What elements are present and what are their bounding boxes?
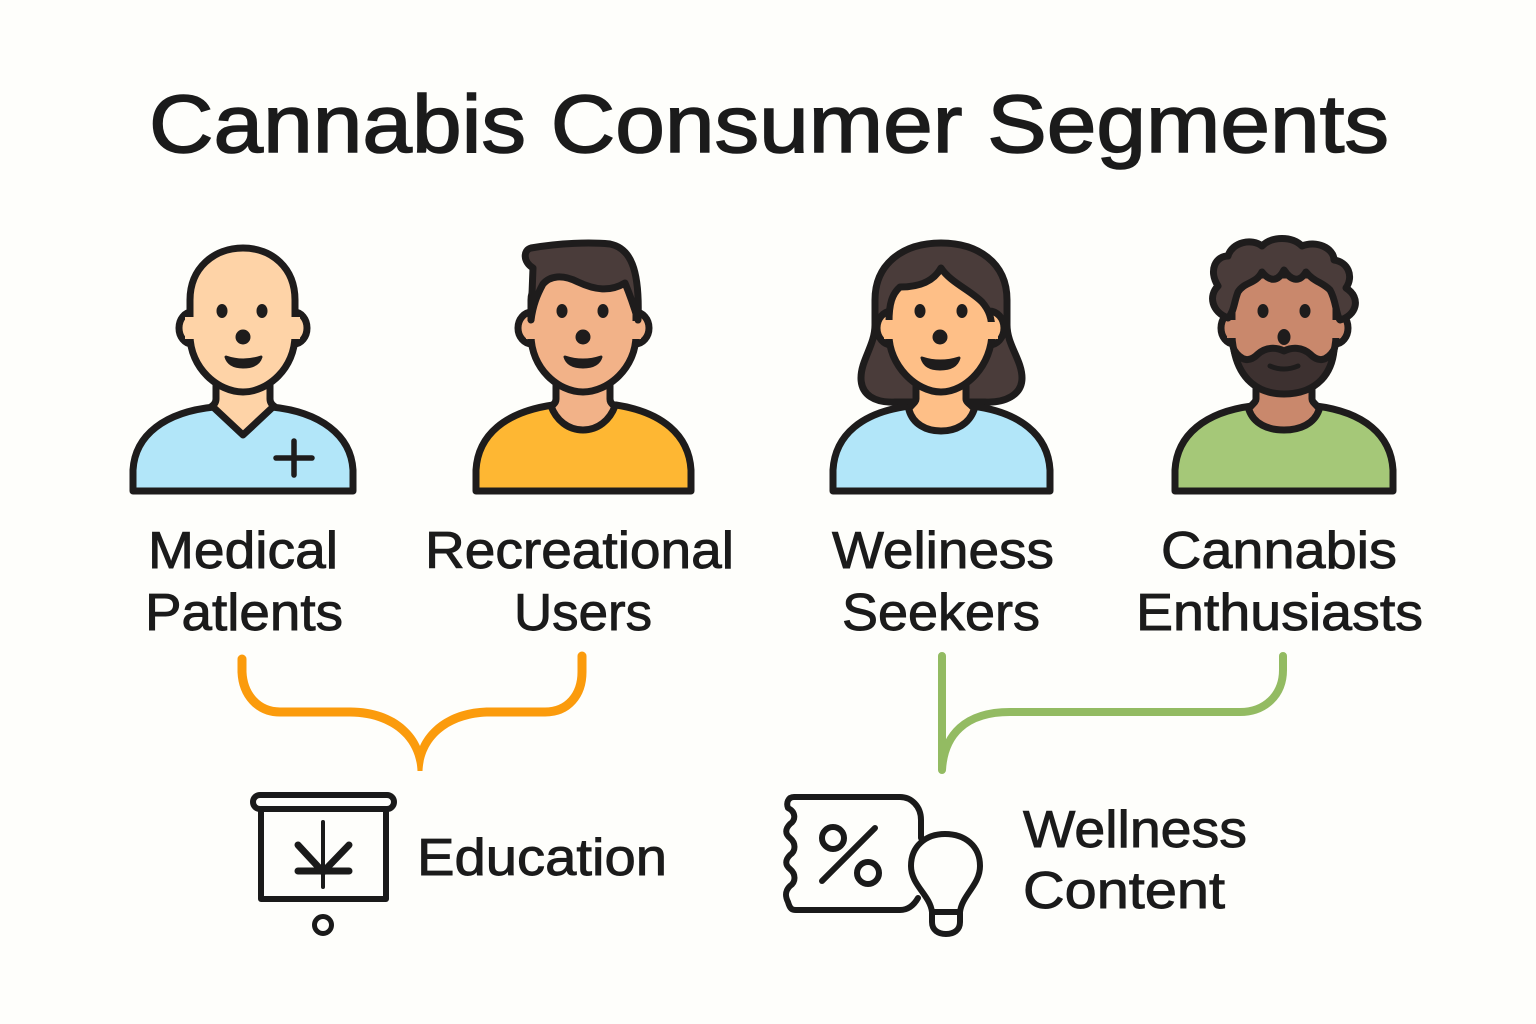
label: Medical Patlents: Medical	[148, 522, 338, 580]
label: Cannabis Enthusiasts: Cannabis	[1161, 522, 1397, 580]
bracket: orange connector to Education	[242, 656, 582, 771]
label: Weliness Seekers: Weliness	[832, 522, 1054, 580]
icon: education projection screen	[253, 795, 394, 934]
label: Recreational Users: Users	[514, 584, 652, 642]
text: Wellness Content	[1023, 801, 1247, 920]
text: Wellness Content: Content	[1023, 862, 1226, 920]
title: Cannabis Consumer Segments	[149, 79, 1389, 170]
label: Medical Patlents: Patlents	[145, 584, 343, 642]
label: Weliness Seekers: Seekers	[842, 584, 1040, 642]
shirt	[133, 407, 353, 491]
label: Cannabis Enthusiasts: Enthusiasts	[1136, 584, 1423, 642]
icon: wellness seeker	[833, 243, 1050, 491]
label: Weliness Seekers	[832, 522, 1054, 642]
cross badge	[276, 441, 312, 475]
neck	[212, 380, 274, 435]
hair back	[861, 243, 1022, 402]
icon: recreational user	[476, 243, 691, 491]
text: Wellness Content: Wellness	[1023, 801, 1247, 859]
icon: coupon and light bulb	[786, 797, 980, 934]
label: Cannabis Enthusiasts	[1136, 522, 1423, 642]
hair	[525, 243, 638, 320]
label: Recreational Users	[425, 522, 734, 642]
curly hair	[1213, 238, 1355, 320]
beard	[1234, 348, 1334, 394]
label: Medical Patlents	[145, 522, 343, 642]
ears	[179, 312, 205, 344]
eyes, nose, smile	[216, 304, 228, 318]
icon: medical patient	[133, 248, 353, 491]
screen pull	[314, 916, 332, 934]
label: Recreational Users: Recreational	[425, 522, 734, 580]
bracket: green connector to Wellness Content	[942, 656, 1283, 770]
text: Education: Education	[417, 829, 667, 887]
icon: cannabis enthusiast	[1175, 238, 1393, 491]
head	[190, 248, 295, 392]
cannabis leaf	[321, 822, 325, 887]
